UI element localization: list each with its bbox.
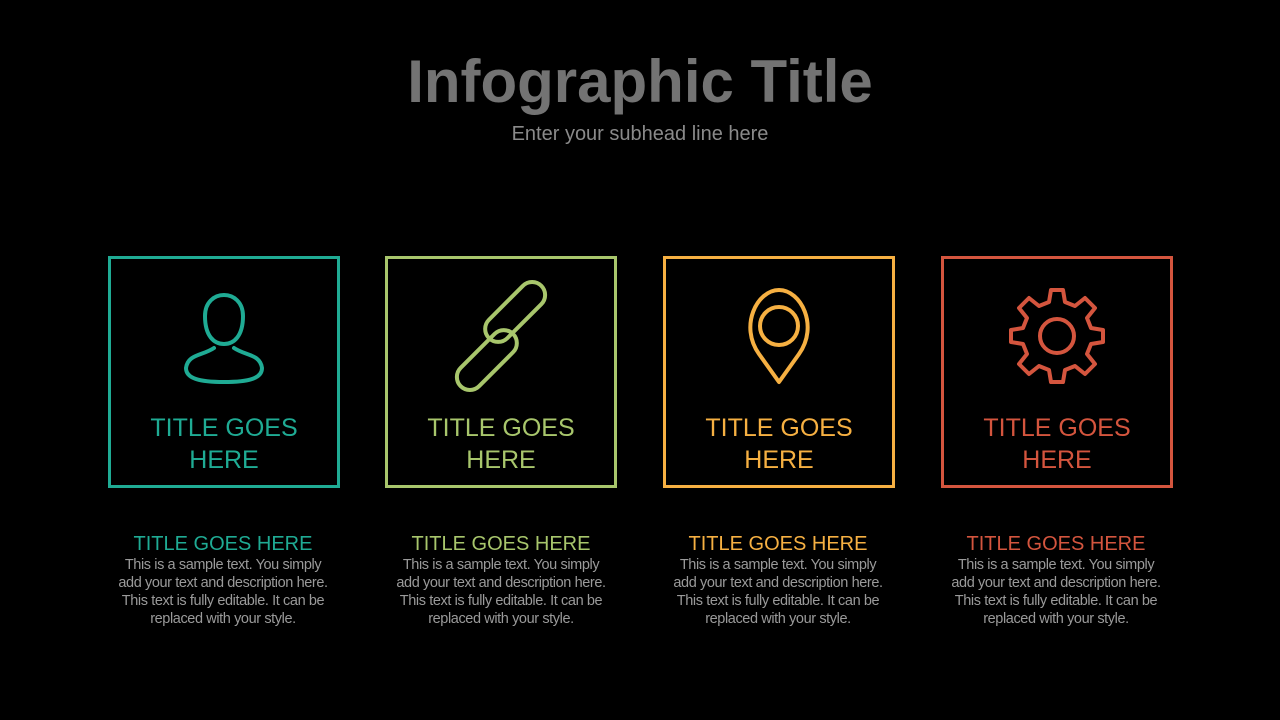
caption 1: TITLE GOES HERE xyxy=(134,533,312,555)
caption 1: This is a sample text. You simply xyxy=(125,557,321,573)
caption 1: replaced with your style. xyxy=(150,611,296,627)
box title xyxy=(983,414,1131,474)
caption 4: replaced with your style. xyxy=(983,611,1129,627)
caption 4: TITLE GOES HERE xyxy=(967,533,1145,555)
panel: box 1 xyxy=(108,256,340,488)
box title xyxy=(150,414,298,474)
box title: TITLE GOES xyxy=(150,414,298,442)
subtitle: Enter your subhead line here xyxy=(512,123,768,145)
icon: location pin xyxy=(748,288,810,384)
caption 4 xyxy=(951,533,1161,627)
caption 3 xyxy=(673,533,883,627)
caption 3: add your text and description here. xyxy=(673,575,883,591)
caption 1 xyxy=(118,533,328,627)
caption 2: This is a sample text. You simply xyxy=(403,557,599,573)
box title: HERE xyxy=(466,446,536,474)
panel: box 4 xyxy=(941,256,1173,488)
caption 2 xyxy=(396,533,606,627)
panel: box 3 xyxy=(663,256,895,488)
caption 1: This text is fully editable. It can be xyxy=(122,593,324,609)
box title: HERE xyxy=(744,446,814,474)
box title: TITLE GOES xyxy=(983,414,1131,442)
box title: TITLE GOES xyxy=(705,414,853,442)
panel: box 2 xyxy=(385,256,617,488)
box title: HERE xyxy=(1022,446,1092,474)
icon: person xyxy=(184,293,264,384)
title: Infographic Title xyxy=(407,48,873,115)
caption 3: replaced with your style. xyxy=(705,611,851,627)
caption 2: replaced with your style. xyxy=(428,611,574,627)
caption 2: TITLE GOES HERE xyxy=(412,533,590,555)
icon: gear xyxy=(1009,288,1105,384)
caption 2: add your text and description here. xyxy=(396,575,606,591)
caption 4: This is a sample text. You simply xyxy=(958,557,1154,573)
box title: HERE xyxy=(189,446,259,474)
caption 4: This text is fully editable. It can be xyxy=(955,593,1157,609)
caption 3: This text is fully editable. It can be xyxy=(677,593,879,609)
caption 3: TITLE GOES HERE xyxy=(689,533,867,555)
box title xyxy=(427,414,575,474)
caption 1: add your text and description here. xyxy=(118,575,328,591)
icon: link xyxy=(454,280,548,392)
box title: TITLE GOES xyxy=(427,414,575,442)
caption 2: This text is fully editable. It can be xyxy=(400,593,602,609)
box title xyxy=(705,414,853,474)
caption 3: This is a sample text. You simply xyxy=(680,557,876,573)
caption 4: add your text and description here. xyxy=(951,575,1161,591)
